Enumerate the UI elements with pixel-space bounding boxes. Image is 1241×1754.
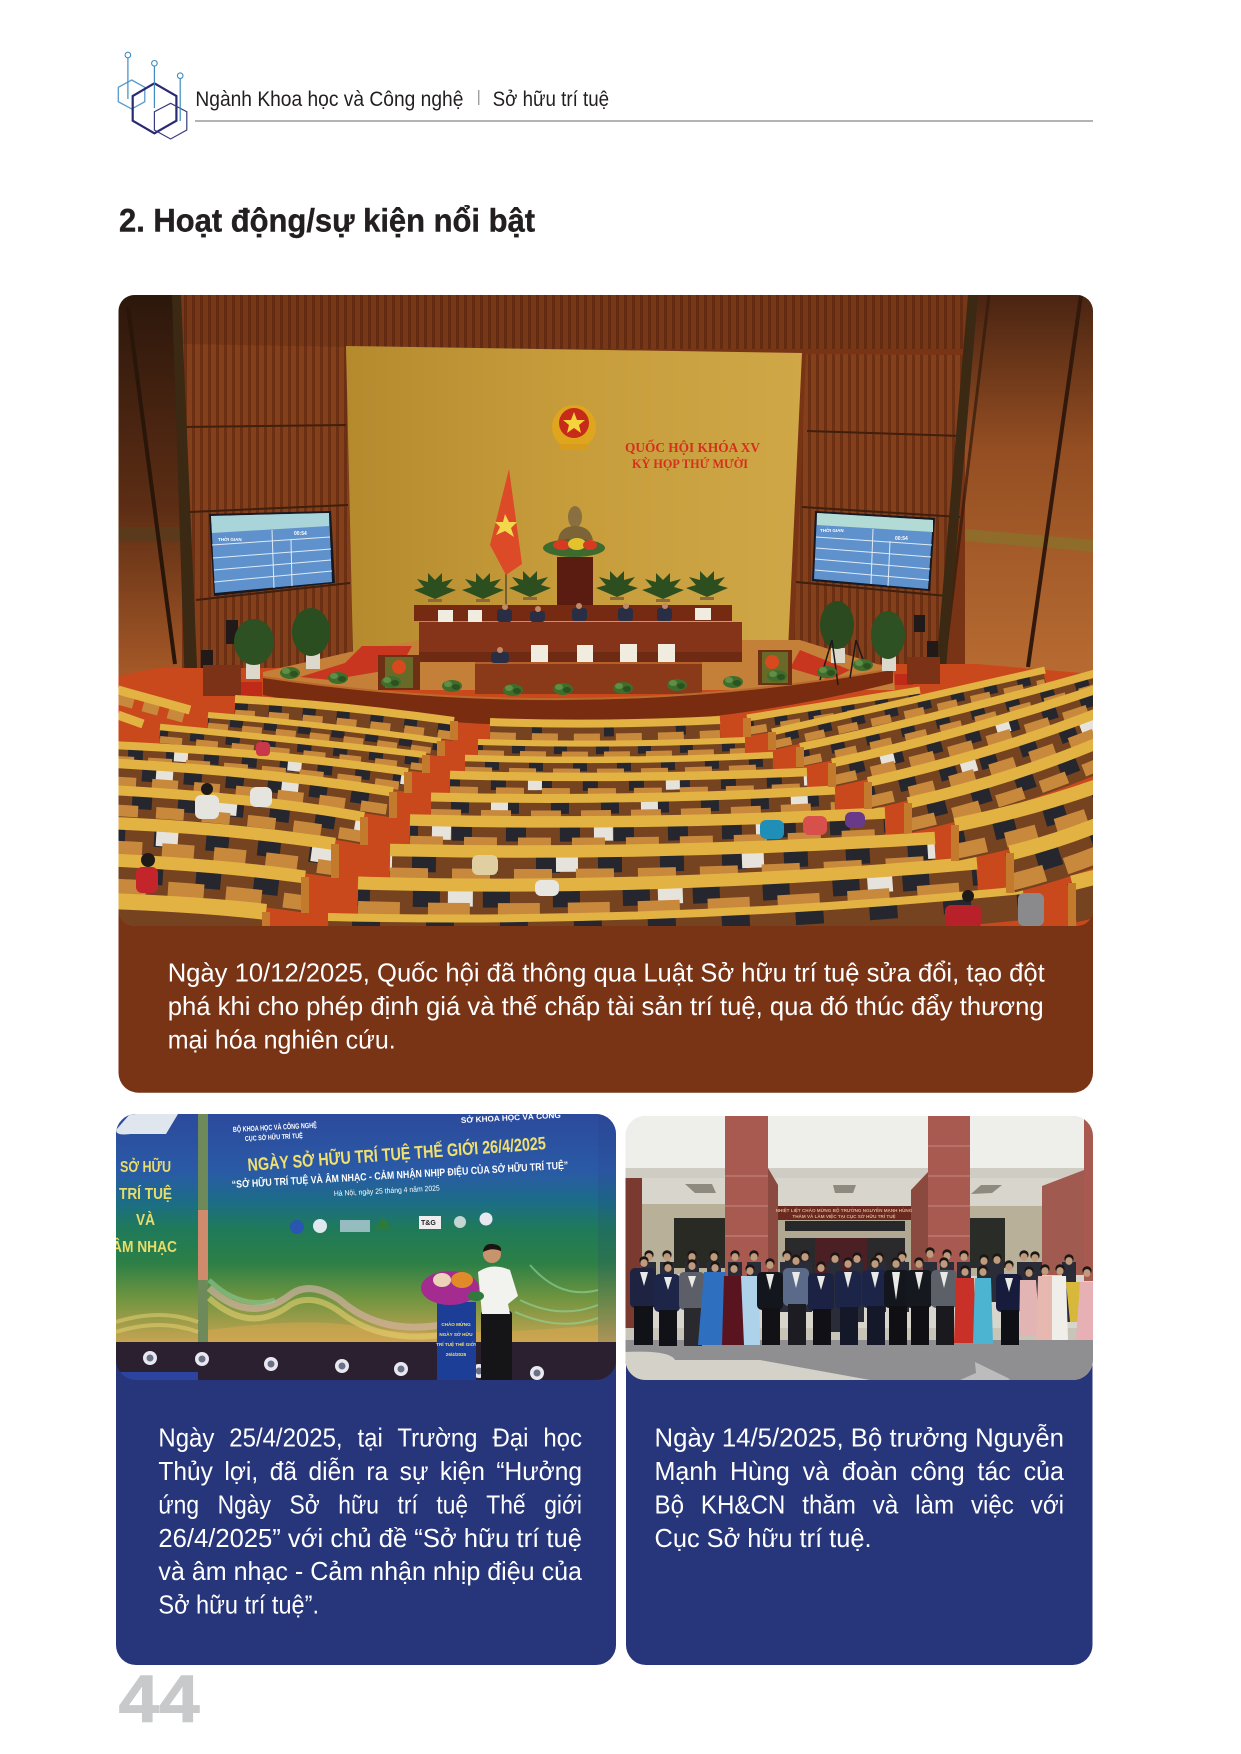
photo: World IP Day stage [112, 1111, 616, 1383]
wall lettering: KỲ HỌP THỨ MƯỜI [632, 456, 748, 471]
text: ministerial visit [654, 1423, 1065, 1553]
main caption text: mại hóa nghiên cứu. [168, 1024, 396, 1054]
text: ministerial visit: Mạnh Hùng và đoàn công tác của [654, 1456, 1065, 1486]
floor [118, 664, 1093, 930]
main caption text: Ngày 10/12/2025, Quốc hội đã thông qua Luật Sở hữu trí tuệ sửa đổi, tạo đột [168, 958, 1045, 988]
page [116, 52, 1093, 1722]
section title: 2. Hoạt động/sự kiện nổi bật [119, 202, 535, 238]
main caption text [168, 958, 1045, 1054]
main screen text: SỞ KHOA HỌC VÀ CÔNG [461, 1111, 561, 1125]
photo: group at the IP office [625, 1116, 1094, 1380]
caption background [118, 295, 1093, 1093]
left screen text: ÂM NHẠC [112, 1237, 177, 1256]
stage plants [414, 571, 728, 602]
main screen text: NGÀY SỞ HỮU TRÍ TUỆ THẾ GIỚI 26/4/2025 [247, 1132, 546, 1175]
delegates in colour, centre [472, 812, 865, 896]
speaker [478, 1244, 518, 1383]
blue background [626, 1130, 1092, 1665]
lectern and flowers: NGÀY SỞ HỮU [439, 1331, 473, 1337]
back row of staff [642, 1247, 1076, 1332]
wall lettering [625, 438, 760, 471]
text: World IP Day: và âm nhạc - Cảm nhận nhịp điệu của [158, 1556, 583, 1586]
left screen text: SỞ HỮU [120, 1156, 171, 1176]
blue background [116, 1130, 616, 1665]
stage lamps [143, 1351, 544, 1380]
podium [235, 603, 913, 726]
left screen text: TRÍ TUỆ [119, 1184, 172, 1203]
main screen text: Hà Nội, ngày 25 tháng 4 năm 2025 [334, 1183, 440, 1198]
flag [490, 469, 522, 606]
photo: National Assembly hall [110, 295, 1100, 933]
vote screen left: THỜI GIAN [218, 535, 242, 542]
text: ministerial visit: Cục Sở hữu trí tuệ. [654, 1523, 872, 1553]
seating: right block [747, 670, 1100, 929]
front row of delegates [630, 1254, 1094, 1346]
main screen text: BỘ KHOA HỌC VÀ CÔNG NGHỆ [233, 1121, 317, 1134]
text: World IP Day: Sở hữu trí tuệ”. [158, 1590, 319, 1620]
vote screen right [812, 511, 935, 591]
text: ministerial visit: Ngày 14/5/2025, Bộ trưởng Nguyễn [654, 1423, 1064, 1453]
main screen text: CỤC SỞ HỮU TRÍ TUỆ [245, 1131, 303, 1143]
header [118, 52, 1093, 139]
delegates in colour, left [136, 742, 272, 893]
main screen text: “SỞ HỮU TRÍ TUỆ VÀ ÂM NHẠC - CẢM NHẬN NHỊP ĐIỆU CỦA SỞ HỮU TRÍ TUỆ” [231, 1159, 569, 1191]
delegate in red, right [945, 890, 1044, 929]
wall lettering: QUỐC HỘI KHÓA XV [625, 438, 760, 456]
vote screen right: 00:54 [895, 536, 908, 542]
text: World IP Day: Thủy lợi, đã diễn ra sự kiện “Hưởng [158, 1456, 582, 1486]
panel: ministerial visit [625, 1116, 1094, 1665]
page number: 44 [119, 1662, 200, 1737]
panel: National Assembly event [110, 295, 1100, 1093]
sponsor logos: T&G [421, 1220, 436, 1227]
lectern and flowers: 26/4/2025 [446, 1352, 467, 1357]
welcome banner: THĂM VÀ LÀM VIỆC TẠI CỤC SỞ HỮU TRÍ TUỆ [792, 1212, 896, 1219]
lectern and flowers [421, 1271, 484, 1380]
emblem [552, 405, 596, 450]
header breadcrumb: Ngành Khoa học và Công nghệ [195, 88, 463, 111]
text: World IP Day: Ngày 25/4/2025, tại Trường Đại học [158, 1423, 582, 1453]
welcome banner: NHIỆT LIỆT CHÀO MỪNG BỘ TRƯỞNG NGUYỄN MẠNH HÙNG [776, 1206, 913, 1213]
side plants and speakers [201, 601, 940, 696]
vote screen right: THỜI GIAN [820, 526, 844, 533]
lectern and flowers: CHÀO MỪNG [441, 1321, 471, 1327]
text: World IP Day: ứng Ngày Sở hữu trí tuệ Thế giới [158, 1490, 582, 1520]
left screen text: VÀ [136, 1210, 155, 1229]
vote screen left: 00:54 [294, 531, 307, 537]
vote screen left [209, 511, 335, 596]
text: ministerial visit: Bộ KH&CN thăm và làm việc với [654, 1490, 1064, 1520]
main caption text: phá khi cho phép định giá và thế chấp tài sản trí tuệ, qua đó thúc đẩy thương [168, 991, 1044, 1021]
text: World IP Day [158, 1423, 583, 1620]
stage flowers [280, 659, 873, 696]
icon: hexagon logo [118, 52, 187, 139]
seating: centre block [328, 720, 1023, 933]
text: World IP Day: 26/4/2025” với chủ đề “Sở hữu trí tuệ [158, 1523, 582, 1553]
main screen text [231, 1111, 569, 1198]
welcome banner [776, 1206, 913, 1220]
lectern and flowers: TRÍ TUỆ THẾ GIỚI [436, 1340, 476, 1347]
left screen text [112, 1156, 177, 1256]
header: Sở hữu trí tuệ [493, 88, 609, 111]
sponsor logos [290, 1212, 492, 1234]
music wave [116, 1265, 598, 1343]
seating: left block [110, 690, 454, 927]
panel: World IP Day event [112, 1111, 616, 1665]
bust and flowers [543, 506, 605, 605]
